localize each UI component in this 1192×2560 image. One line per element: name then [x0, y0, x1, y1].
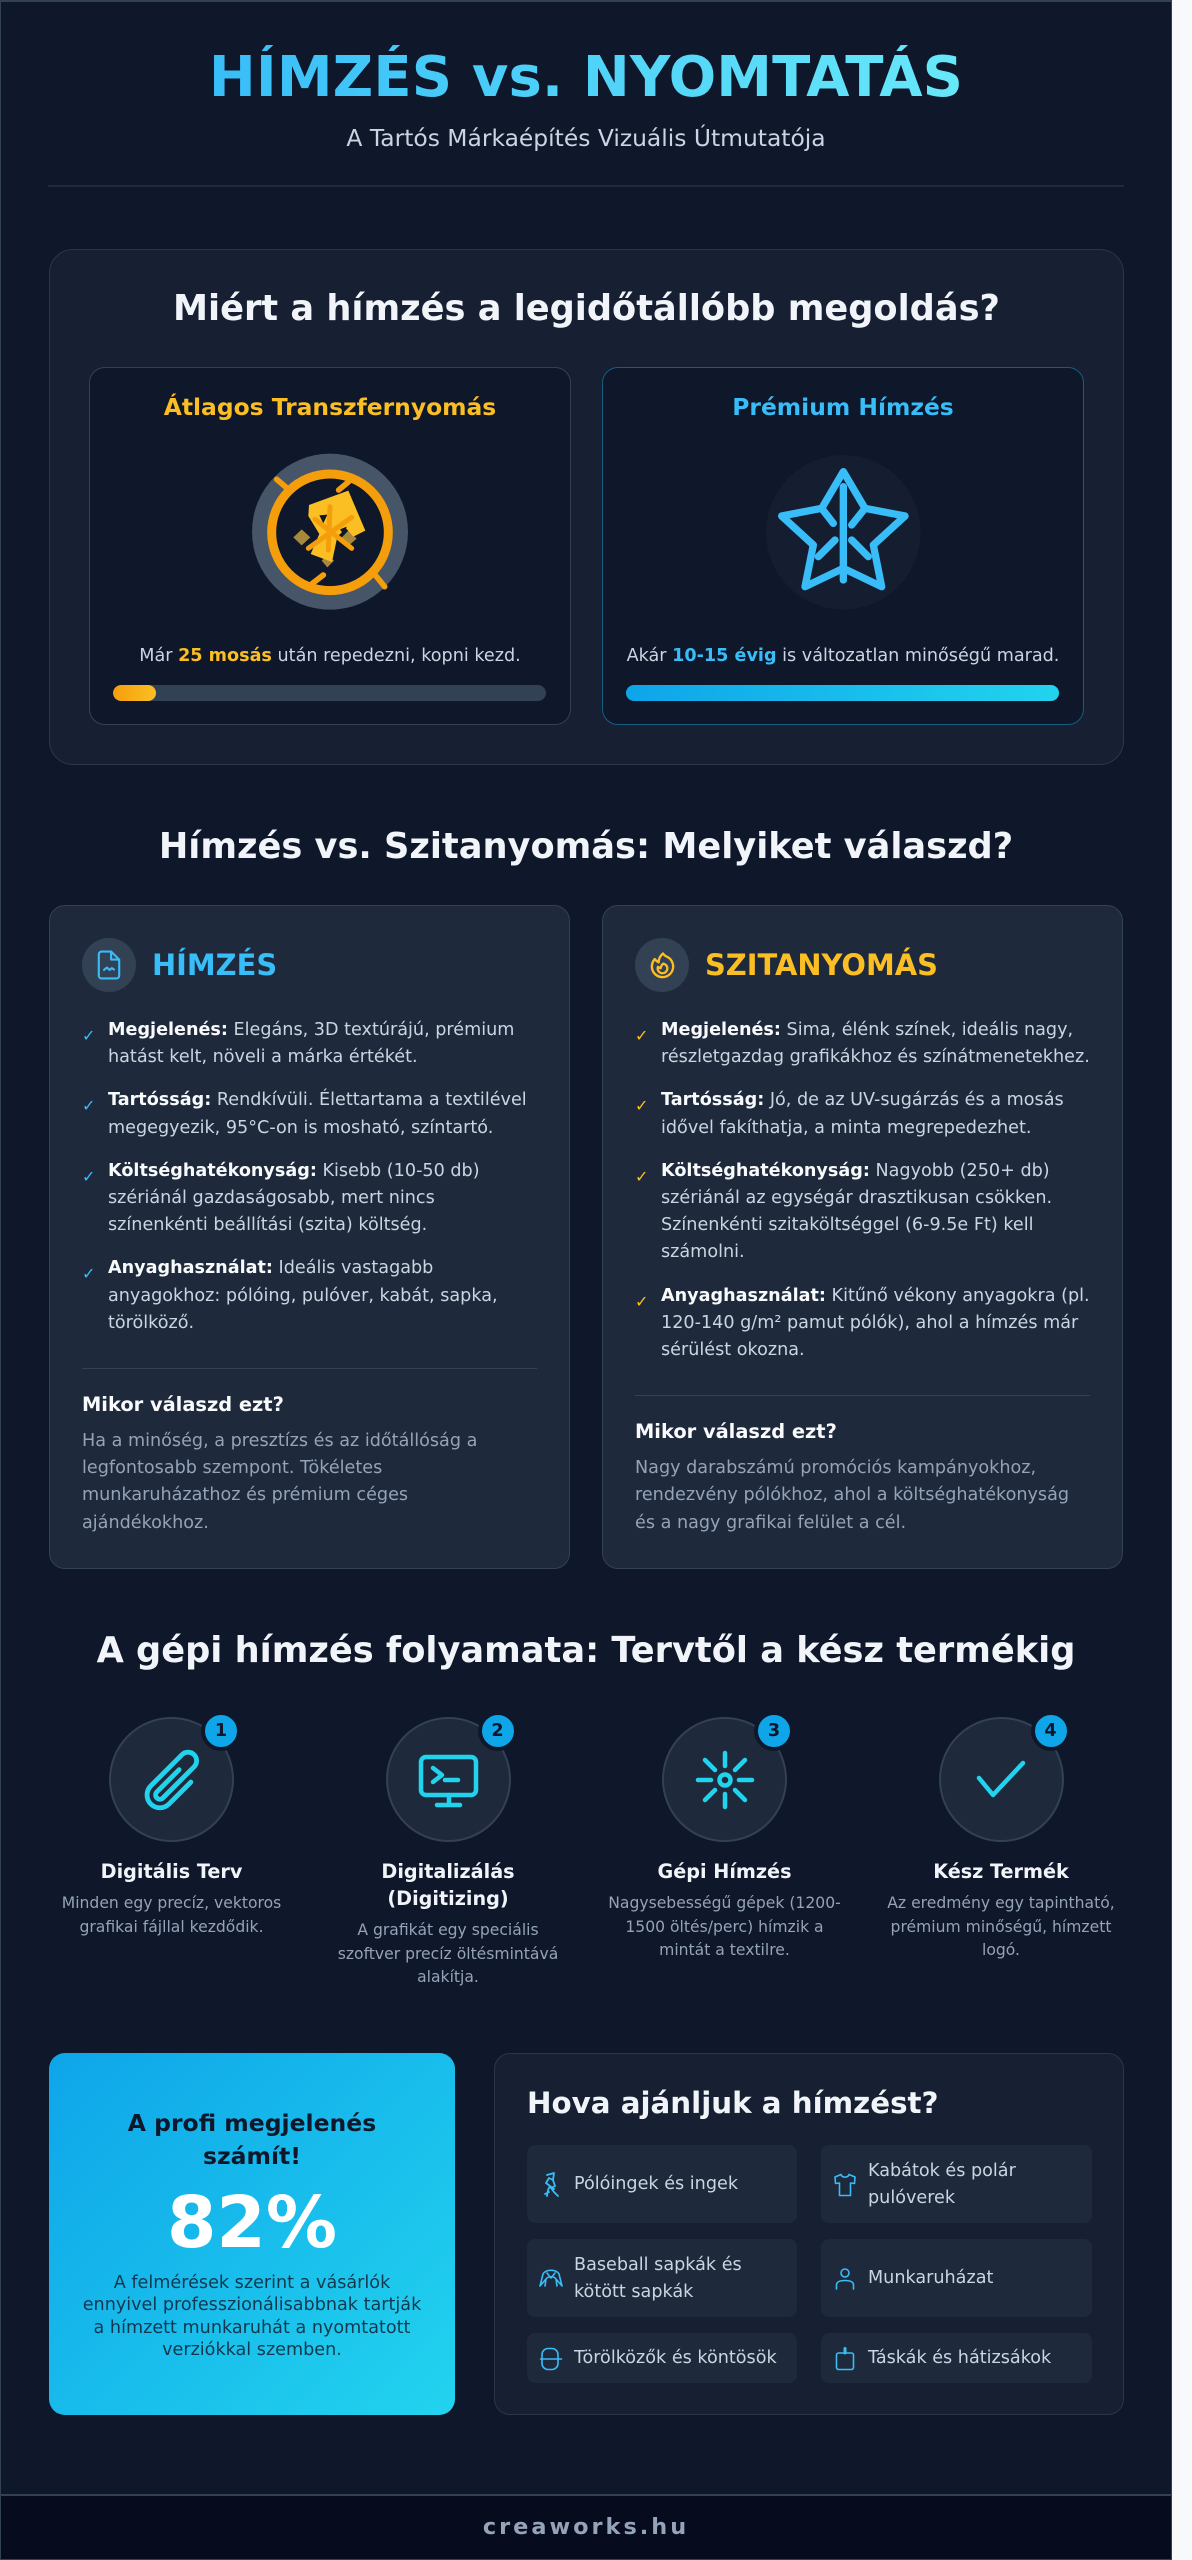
callout heading: számít! — [203, 2142, 301, 2170]
item label: Kabátok és polár — [868, 2161, 1016, 2181]
footer: creaworks.hu — [483, 2514, 689, 2540]
step number: 1 — [215, 1721, 227, 1741]
feature list — [82, 1020, 527, 1333]
use item: jackets — [821, 2145, 1092, 2223]
step description: Minden egy precíz, vektoros — [62, 1894, 281, 1912]
step 4 — [887, 1715, 1115, 1959]
progress bar: full — [626, 685, 1059, 701]
use item: caps — [527, 2239, 797, 2317]
when to choose text: rendezvény pólókhoz, ahol a költséghatékonyság — [635, 1485, 1069, 1505]
use item: towels — [527, 2333, 797, 2383]
step number: 3 — [768, 1721, 780, 1741]
step description: prémium minőségű, hímzett — [891, 1918, 1111, 1936]
when to choose text: Ha a minőség, a presztízs és az időtállóság a — [82, 1431, 477, 1451]
icon: polo figure — [544, 2172, 559, 2197]
step description: szoftver precíz öltésmintává — [338, 1944, 558, 1962]
step description: Nagysebességű gépek (1200- — [608, 1894, 841, 1912]
feature list: idővel fakíthatja, a minta megrepedezhet. — [661, 1118, 1031, 1138]
subtitle: A Tartós Márkaépítés Vizuális Útmutatója — [346, 124, 826, 152]
feature list: hatást kelt, növeli a márka értékét. — [108, 1047, 418, 1067]
when to choose text: munkaruházathoz és prémium céges — [82, 1485, 408, 1505]
card heading: Prémium Hímzés — [732, 393, 954, 421]
feature list: Anyaghasználat: Ideális vastagabb — [108, 1258, 433, 1278]
when to choose text — [635, 1458, 1069, 1533]
feature list: szériánál gazdaságosabb, mert nincs — [108, 1188, 435, 1208]
panel: recommended uses — [494, 2053, 1124, 2415]
step title — [381, 1860, 515, 1910]
when to choose heading: Mikor válaszd ezt? — [635, 1420, 837, 1443]
step description — [887, 1894, 1115, 1959]
heading: embroidery vs screen print: Hímzés vs. Szitanyomás: Melyiket válaszd? — [159, 826, 1013, 867]
step description: 1500 öltés/perc) hímzik a — [625, 1918, 824, 1936]
card heading: Átlagos Transzfernyomás — [164, 393, 496, 421]
icon: towel — [540, 2348, 562, 2370]
progress bar: 10% — [113, 685, 546, 701]
item label: kötött sapkák — [574, 2282, 693, 2302]
step description: alakítja. — [417, 1968, 479, 1986]
feature list: ✓ — [635, 1292, 648, 1311]
feature list: megegyezik, 95°C-on is mosható, színtartó. — [108, 1118, 493, 1138]
feature list: részletgazdag grafikákhoz és színátmenetekhez. — [661, 1047, 1090, 1067]
icon: cap — [539, 2270, 563, 2287]
step number — [478, 1711, 518, 1751]
when to choose text — [82, 1431, 477, 1533]
panel: durability comparison — [49, 249, 1124, 765]
icon: flame — [635, 938, 689, 992]
step description: mintát a textilre. — [659, 1941, 790, 1959]
when to choose text: és a nagy grafikai felület a cél. — [635, 1513, 906, 1533]
panel title: SZITANYOMÁS — [705, 948, 938, 982]
step title: Digitális Terv — [101, 1860, 242, 1883]
feature list: ✓ — [82, 1096, 95, 1115]
feature list: ✓ — [82, 1167, 95, 1186]
panel: embroidery — [49, 905, 570, 1569]
feature list: Tartósság: Rendkívüli. Élettartama a textilével — [108, 1090, 527, 1110]
feature list: Tartósság: Jó, de az UV-sugárzás és a mosás — [661, 1090, 1064, 1110]
icon: stitched star — [778, 468, 909, 590]
feature list: Megjelenés: Sima, élénk színek, ideális nagy, — [661, 1020, 1073, 1040]
step description: Az eredmény egy tapintható, — [887, 1894, 1115, 1912]
feature list: ✓ — [82, 1026, 95, 1045]
step description: grafikai fájllal kezdődik. — [79, 1918, 264, 1936]
step number: 2 — [491, 1721, 504, 1741]
icon: bag — [836, 2347, 854, 2370]
feature list: Színenkénti szitaköltséggel (6-9.5e Ft) kell — [661, 1215, 1033, 1235]
item label — [574, 2255, 742, 2302]
item label: Baseball sapkák és — [574, 2255, 742, 2275]
feature list: ✓ — [635, 1167, 648, 1186]
callout heading: A profi megjelenés — [128, 2109, 376, 2137]
feature list: Költséghatékonyság: Kisebb (10-50 db) — [108, 1161, 480, 1181]
feature list: Költséghatékonyság: Nagyobb (250+ db) — [661, 1161, 1050, 1181]
step description: A grafikát egy speciális — [357, 1921, 539, 1939]
heading: why embroidery: Miért a hímzés a legidőtállóbb megoldás? — [173, 288, 1000, 329]
step title: Digitalizálás — [381, 1860, 515, 1883]
panel: screen printing — [602, 905, 1123, 1569]
callout text — [83, 2273, 422, 2360]
title: HÍMZÉS vs. NYOMTATÁS — [209, 45, 963, 110]
heading: embroidery process: A gépi hímzés folyamata: Tervtől a kész termékig — [97, 1630, 1075, 1671]
card: premium embroidery — [602, 367, 1084, 725]
step description — [62, 1894, 281, 1936]
icon: paperclip — [109, 1717, 234, 1842]
step number: 4 — [1044, 1721, 1057, 1741]
durability text: Akár 10-15 évig is változatlan minőségű marad. — [627, 646, 1059, 666]
when to choose heading: Mikor válaszd ezt? — [82, 1393, 284, 1416]
step description — [338, 1921, 558, 1986]
step 3 — [608, 1715, 841, 1959]
panel title: HÍMZÉS — [152, 948, 277, 982]
icon: cracked star in crosshair — [252, 454, 408, 610]
callout text: ennyivel professzionálisabbnak tartják — [83, 2295, 421, 2315]
step 1 — [62, 1715, 281, 1936]
feature list: szériánál az egységár drasztikusan csökken. — [661, 1188, 1052, 1208]
big number: 82% — [167, 2181, 337, 2264]
feature list: számolni. — [661, 1242, 745, 1262]
step title: Gépi Hímzés — [658, 1860, 792, 1883]
feature list: sérülést okozna. — [661, 1340, 805, 1360]
feature list — [635, 1020, 1090, 1360]
feature list: ✓ — [635, 1026, 648, 1045]
feature list: Megjelenés: Elegáns, 3D textúrájú, prémium — [108, 1020, 514, 1040]
item label: Pólóingek és ingek — [574, 2174, 738, 2194]
item label — [868, 2161, 1016, 2208]
use item: workwear — [821, 2239, 1092, 2317]
item label: Törölközők és köntösök — [574, 2348, 777, 2368]
icon: document — [82, 938, 136, 992]
callout heading — [128, 2109, 376, 2170]
panel header — [82, 938, 277, 992]
step number — [754, 1711, 794, 1751]
feature list: ✓ — [635, 1096, 648, 1115]
panel header — [635, 938, 938, 992]
use item: bags — [821, 2333, 1092, 2383]
icon: check mark — [938, 1717, 1064, 1842]
when to choose text: legfontosabb szempont. Tökéletes — [82, 1458, 382, 1478]
feature list: anyagokhoz: pólóing, pulóver, kabát, sapka, — [108, 1286, 498, 1306]
feature list: ✓ — [82, 1264, 95, 1283]
when to choose text: Nagy darabszámú promóciós kampányokhoz, — [635, 1458, 1036, 1478]
icon: monitor with prompt — [386, 1717, 510, 1842]
when to choose text: ajándékokhoz. — [82, 1513, 209, 1533]
callout text: A felmérések szerint a vásárlók — [114, 2273, 390, 2293]
step number — [201, 1711, 241, 1751]
callout text: verziókkal szemben. — [162, 2340, 342, 2360]
panel heading: Hova ajánljuk a hímzést? — [527, 2086, 939, 2120]
step description: logó. — [982, 1941, 1020, 1959]
card: average transfer print — [89, 367, 571, 725]
step title: (Digitizing) — [387, 1887, 509, 1910]
use item: polo shirts — [527, 2145, 797, 2223]
callout: 82 percent — [49, 2053, 455, 2415]
item label: Táskák és hátizsákok — [868, 2348, 1051, 2368]
feature list: színenkénti beállítási (szita) költség. — [108, 1215, 427, 1235]
feature list: törölköző. — [108, 1313, 194, 1333]
step description — [608, 1894, 841, 1959]
icon: person — [836, 2268, 854, 2290]
footer — [0, 2494, 1172, 2560]
item label: pulóverek — [868, 2188, 955, 2208]
item label: Munkaruházat — [868, 2268, 993, 2288]
feature list: 120-140 g/m² pamut pólók), ahol a hímzés már — [661, 1313, 1078, 1333]
step 2 — [338, 1715, 558, 1986]
feature list: Anyaghasználat: Kitűnő vékony anyagokra (pl. — [661, 1286, 1090, 1306]
icon: stitching spark — [662, 1717, 787, 1842]
callout text: a hímzett munkaruhát a nyomtatott — [94, 2318, 410, 2338]
step number — [1030, 1711, 1070, 1751]
durability text: Már 25 mosás után repedezni, kopni kezd. — [139, 646, 521, 666]
step title: Kész Termék — [933, 1860, 1069, 1883]
icon: shirt — [834, 2174, 856, 2196]
